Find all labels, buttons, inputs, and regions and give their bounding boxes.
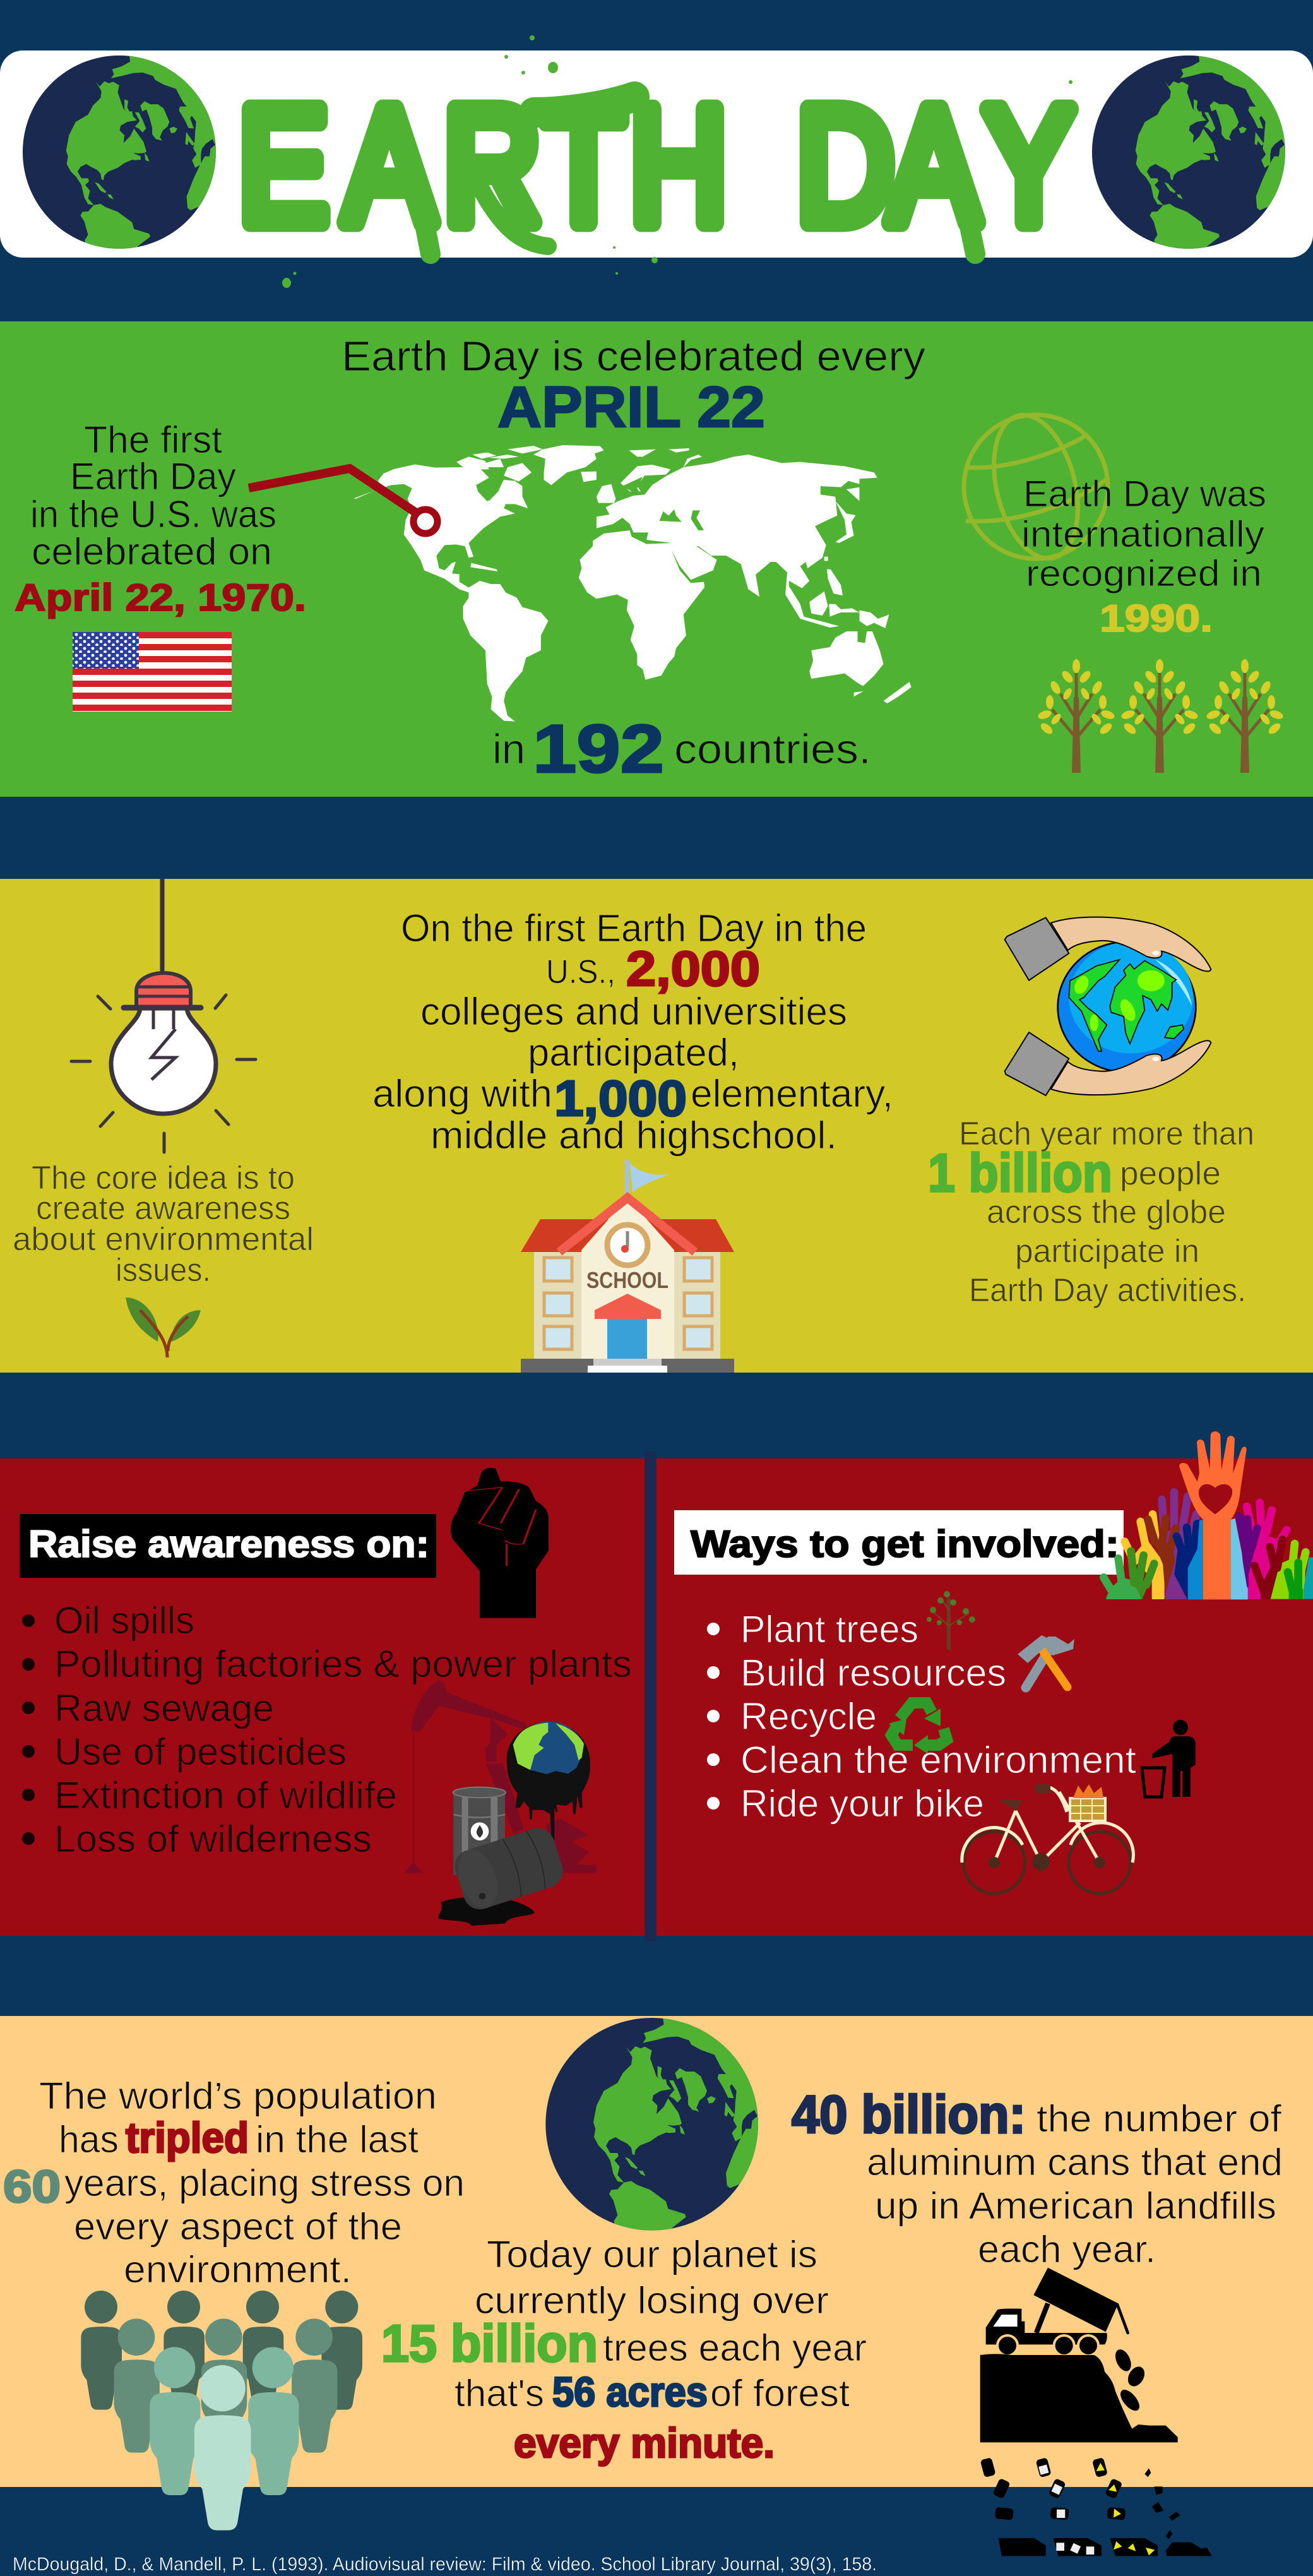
list: ways to get involved: Plant trees: [740, 1608, 918, 1650]
population text: 60: [3, 2162, 61, 2212]
heading: raise awareness on: [20, 1514, 436, 1578]
one billion people text: [928, 1116, 1254, 1309]
icon: globe: [545, 2017, 762, 2236]
in 192 countries: [492, 710, 871, 787]
icon: left globe: [23, 55, 219, 254]
icon: sprout: [126, 1297, 201, 1357]
illustration: dump truck and landfill: [980, 2268, 1212, 2556]
core idea text: The core idea is to: [32, 1160, 295, 1196]
list: ways to get involved: Ride your bike: [740, 1782, 984, 1825]
heading: ways to get involved: [674, 1510, 1124, 1575]
internationally recognized text: internationally: [1021, 514, 1264, 555]
list: ways to get involved: Clean the environment: [740, 1739, 1136, 1781]
population text: years, placing stress on: [64, 2162, 465, 2204]
first Earth Day participation text: [372, 907, 893, 1157]
icon: tools: [1018, 1635, 1074, 1688]
core idea text: [13, 1160, 314, 1289]
first Earth Day participation text: participated,: [528, 1031, 739, 1074]
core idea text: about environmental: [13, 1221, 314, 1258]
first Earth Day text: in the U.S. was: [30, 493, 276, 535]
trees lost text: Today our planet is: [487, 2233, 817, 2275]
internationally recognized text: Earth Day was: [1023, 474, 1266, 515]
divider: [645, 1452, 656, 1941]
first Earth Day participation text: middle and highschool.: [431, 1114, 837, 1157]
heading: ways to get involved: Ways to get involved:: [691, 1523, 1119, 1565]
internationally recognized text: 1990.: [1100, 597, 1213, 640]
list: ways to get involved: Recycle: [740, 1695, 877, 1738]
aluminum cans text: [792, 2085, 1283, 2270]
aluminum cans text: the number of: [1037, 2097, 1281, 2140]
trees lost text: currently losing over: [475, 2279, 829, 2322]
panel: April 22 green section: [0, 321, 1313, 797]
one billion people text: across the globe: [987, 1194, 1226, 1231]
world map: [354, 445, 912, 722]
population text: tripled: [126, 2114, 249, 2162]
in 192 countries: 192: [533, 710, 664, 787]
population text: The world’s population: [39, 2075, 437, 2117]
one billion people text: people: [1120, 1155, 1221, 1192]
population text: every aspect of the: [74, 2205, 402, 2248]
panel: peach facts section: [0, 2016, 1313, 2556]
list: raise awareness topics: Oil spills: [54, 1599, 194, 1642]
first Earth Day text: [15, 419, 306, 619]
heading: raise awareness on: Raise awareness on:: [28, 1523, 429, 1565]
one billion people text: 1 billion: [928, 1143, 1112, 1203]
icon: recycle: [889, 1703, 947, 1754]
illustration: oil pump and oil-soaked earth: [404, 1681, 597, 1926]
heading: celebrated every April 22: Earth Day is celebrated every: [342, 333, 926, 380]
one billion people text: Earth Day activities.: [969, 1272, 1246, 1309]
population text: in the last: [256, 2118, 419, 2161]
trees lost text: trees each year: [603, 2327, 867, 2369]
first Earth Day participation text: U.S.,: [546, 953, 615, 991]
illustration: raised hands: [1103, 1431, 1313, 1599]
icon: wire globe: [964, 406, 1108, 568]
one billion people text: Each year more than: [959, 1116, 1254, 1152]
trees lost text: of forest: [710, 2372, 850, 2414]
internationally recognized text: [1021, 474, 1266, 640]
panel: awareness yellow section: [0, 879, 1313, 1373]
icon: school: [521, 1160, 734, 1373]
list: raise awareness topics: Extinction of wildlife: [54, 1774, 397, 1816]
illustration: people: [81, 2291, 362, 2531]
internationally recognized text: recognized in: [1026, 553, 1262, 594]
population text: environment.: [124, 2248, 352, 2291]
first Earth Day text: celebrated on: [32, 530, 272, 573]
trees lost text: every minute.: [514, 2419, 775, 2466]
title: Earth Day: EARTH DAY: [239, 75, 1074, 258]
trees lost text: that's: [454, 2372, 544, 2414]
heading: celebrated every April 22: APRIL 22: [497, 375, 765, 439]
icon: right globe: [1092, 55, 1288, 254]
list: ways to get involved: [707, 1608, 1136, 1825]
aluminum cans text: each year.: [978, 2228, 1156, 2270]
icon: raised fist: [451, 1468, 549, 1618]
population text: has: [59, 2118, 119, 2161]
first Earth Day participation text: along with: [372, 1072, 552, 1115]
list: raise awareness topics: Raw sewage: [54, 1687, 274, 1729]
first Earth Day participation text: On the first Earth Day in the: [401, 907, 867, 950]
first Earth Day text: The first: [84, 419, 222, 461]
icon: trees: [1037, 659, 1284, 773]
panel: red section: [0, 1431, 1313, 1941]
trees lost text: 15 billion: [381, 2314, 598, 2373]
list: raise awareness topics: [22, 1599, 632, 1860]
list: raise awareness topics: Use of pesticides: [54, 1731, 347, 1773]
trees lost text: [381, 2233, 867, 2466]
one billion people text: participate in: [1015, 1233, 1199, 1270]
icon: U.S. flag: [73, 632, 232, 712]
list: raise awareness topics: Loss of wilderness: [54, 1818, 372, 1860]
icon: school: SCHOOL: [586, 1267, 668, 1293]
core idea text: issues.: [116, 1252, 211, 1289]
icon: person with bin: [1142, 1720, 1196, 1797]
in 192 countries: in: [492, 725, 525, 772]
icon: hands holding earth: [1005, 917, 1211, 1095]
callout line to U.S.: [249, 468, 437, 534]
trees lost text: 56 acres: [552, 2368, 708, 2415]
icon: small tree: [927, 1591, 975, 1650]
aluminum cans text: up in American landfills: [875, 2185, 1276, 2227]
list: ways to get involved: Build resources: [740, 1652, 1006, 1694]
first Earth Day participation text: colleges and universities: [420, 990, 847, 1033]
aluminum cans text: 40 billion:: [792, 2085, 1026, 2144]
first Earth Day text: April 22, 1970.: [15, 576, 306, 619]
title banner: [0, 35, 1313, 288]
first Earth Day participation text: 2,000: [626, 941, 760, 996]
population text: [3, 2075, 465, 2291]
first Earth Day text: Earth Day: [70, 455, 236, 498]
core idea text: create awareness: [36, 1190, 290, 1227]
in 192 countries: countries.: [674, 725, 871, 772]
heading: celebrated every April 22: [342, 333, 926, 439]
first Earth Day participation text: 1,000: [554, 1070, 687, 1126]
citation: McDougald, D., & Mandell, P. L. (1993). Audiovisual review: Film & video. School Library Journal, 39(3), 158.: [13, 2554, 877, 2575]
first Earth Day participation text: elementary,: [691, 1072, 893, 1115]
aluminum cans text: aluminum cans that end: [867, 2141, 1283, 2183]
icon: bicycle: [962, 1784, 1133, 1893]
list: raise awareness topics: Polluting factories & power plants: [54, 1643, 632, 1685]
icon: light bulb: [71, 879, 256, 1152]
